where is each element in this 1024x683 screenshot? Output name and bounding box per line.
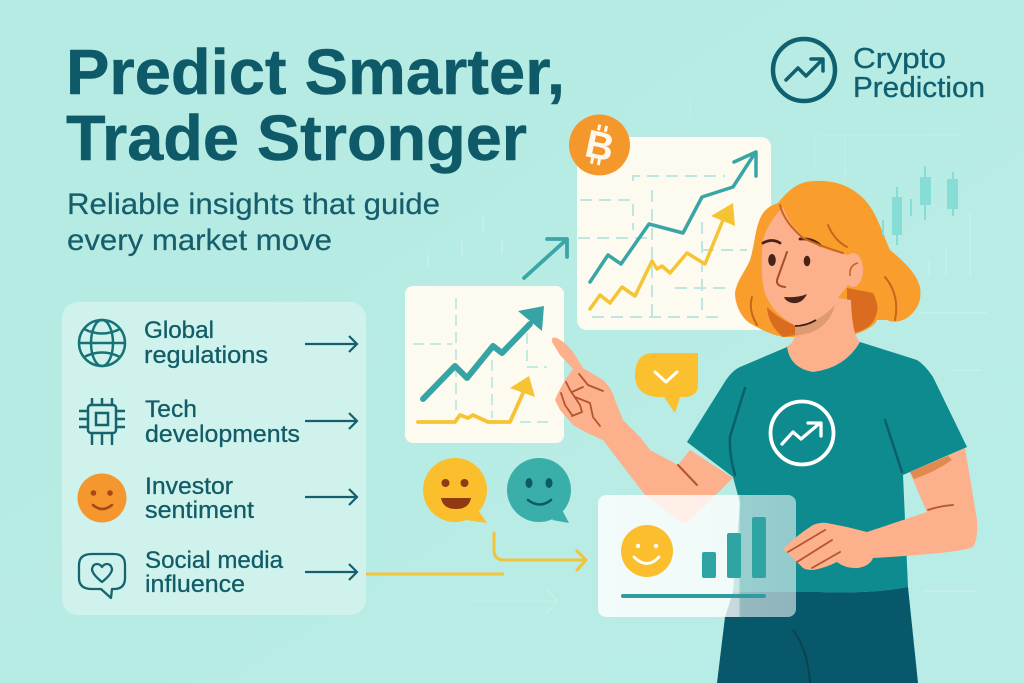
label: social media influence — [145, 547, 284, 598]
logo wordmark: Crypto — [853, 43, 946, 75]
logo icon — [773, 39, 835, 101]
label: investor sentiment: Investor — [145, 473, 233, 500]
candlestick chart backdrop — [883, 166, 958, 245]
arrow: tech developments — [305, 413, 357, 429]
pants — [717, 587, 918, 683]
teal trend arrow — [423, 306, 544, 399]
arrow: global regulations — [305, 336, 357, 352]
logo — [773, 39, 985, 104]
label: global regulations — [144, 317, 268, 369]
label: social media influence: Social media — [145, 547, 284, 574]
icon: orange smiley — [78, 474, 126, 522]
label: global regulations: regulations — [144, 342, 268, 369]
shirt — [687, 342, 967, 592]
teal trend line — [590, 152, 756, 282]
yellow smiley — [621, 525, 673, 577]
label: global regulations: Global — [144, 317, 214, 344]
icon: globe — [79, 320, 125, 366]
title — [66, 36, 565, 174]
panel: glass sentiment dashboard — [598, 495, 796, 617]
icon: bitcoin coin: B — [581, 123, 618, 170]
emoji bubble: yellow laughing — [423, 458, 487, 523]
speech bubble: check — [635, 353, 698, 413]
subtitle — [67, 188, 440, 257]
label: investor sentiment — [145, 473, 254, 524]
yellow trend line — [590, 203, 735, 309]
subtitle: Reliable insights that guide — [67, 188, 440, 221]
label: social media influence: influence — [145, 571, 245, 598]
label: tech developments: Tech — [145, 396, 197, 423]
neck shadow — [795, 305, 835, 336]
yellow connector line — [366, 572, 504, 576]
title: Predict Smarter, — [66, 36, 565, 108]
chart card: large — [577, 137, 771, 330]
baseline — [621, 594, 766, 598]
arrow: between charts — [524, 239, 567, 278]
hair — [735, 181, 920, 337]
title: Trade Stronger — [66, 102, 527, 174]
label: tech developments: developments — [145, 421, 300, 448]
arrow: yellow elbow connector — [494, 533, 586, 570]
icon: bitcoin coin — [569, 114, 630, 176]
shirt logo — [770, 402, 834, 464]
arrow: faint ghost — [470, 588, 558, 614]
logo wordmark: Prediction — [853, 72, 985, 104]
hair strands — [751, 205, 896, 325]
supporting arm and hand — [783, 448, 977, 570]
arrow: investor sentiment — [305, 489, 357, 505]
chart card: small — [405, 286, 564, 443]
subtitle: every market move — [67, 224, 332, 257]
logo wordmark — [853, 43, 985, 104]
bar chart — [702, 517, 766, 578]
neck — [786, 298, 860, 372]
yellow trend arrow — [418, 376, 535, 422]
label: tech developments — [145, 396, 300, 448]
person — [552, 181, 967, 683]
label: investor sentiment: sentiment — [145, 497, 254, 524]
panel: factors list — [62, 302, 366, 615]
arrow: social media influence — [305, 564, 357, 580]
icon: heart speech bubble — [79, 554, 125, 598]
emoji bubble: teal smiling — [507, 458, 571, 523]
pointing arm and hand — [552, 338, 733, 523]
face — [762, 207, 863, 327]
icon: chip — [79, 398, 125, 445]
